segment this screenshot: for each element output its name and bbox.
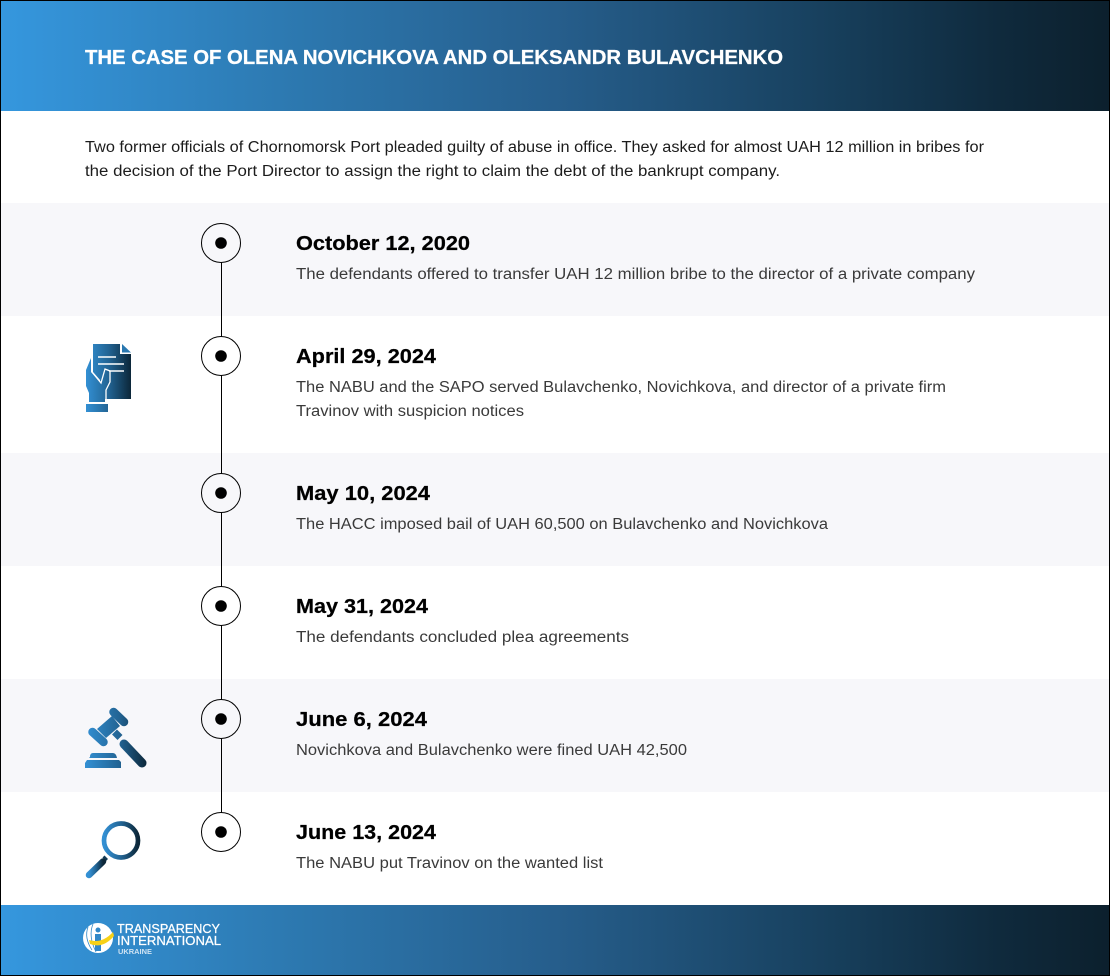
event: May 31, 2024: May 31, 2024 — [296, 595, 429, 618]
event: June 13, 2024: June 13, 2024 — [296, 821, 437, 844]
marker: June 13, 2024 — [202, 812, 240, 852]
event: May 10, 2024 — [296, 482, 828, 533]
event: April 29, 2024: April 29, 2024 — [296, 345, 437, 368]
row background: May 10, 2024 — [1, 453, 1109, 566]
event: April 29, 2024: Travinov with suspicion notices — [296, 403, 524, 420]
event: May 10, 2024: The HACC imposed bail of UAH 60,500 on Bulavchenko and Novichkova — [296, 516, 828, 533]
intro text — [85, 139, 984, 180]
event: April 29, 2024 — [296, 345, 946, 420]
icon: hand holding document — [86, 344, 131, 412]
intro text: the decision of the Port Director to assign the right to claim the debt of the bankrupt company. — [85, 163, 780, 180]
marker: April 29, 2024 — [202, 336, 240, 376]
event: June 6, 2024: Novichkova and Bulavchenko were fined UAH 42,500 — [296, 742, 687, 759]
event: October 12, 2020: The defendants offered to transfer UAH 12 million bribe to the director of a private company — [296, 266, 975, 283]
event: October 12, 2020 — [296, 232, 975, 283]
footer band — [1, 905, 1109, 975]
marker: May 31, 2024 — [202, 586, 240, 626]
event: May 31, 2024: The defendants concluded plea agreements — [296, 629, 629, 646]
event: June 6, 2024 — [296, 708, 687, 759]
row background: June 6, 2024 — [1, 679, 1109, 792]
logo: Transparency International Ukraine: INTERNATIONAL — [117, 933, 221, 948]
logo: Transparency International Ukraine — [83, 921, 221, 956]
event: May 31, 2024 — [296, 595, 629, 646]
event: October 12, 2020: October 12, 2020 — [296, 232, 470, 255]
logo: Transparency International Ukraine: TRANSPARENCY — [117, 921, 220, 936]
icon: judge gavel — [85, 712, 142, 768]
marker: June 6, 2024 — [202, 700, 240, 738]
title: THE CASE OF OLENA NOVICHKOVA AND OLEKSANDR BULAVCHENKO — [85, 46, 783, 69]
header band — [1, 1, 1109, 111]
event: June 6, 2024: June 6, 2024 — [296, 708, 428, 731]
marker: May 10, 2024 — [202, 474, 240, 512]
logo: Transparency International Ukraine: UKRAINE — [118, 949, 152, 956]
event: April 29, 2024: The NABU and the SAPO served Bulavchenko, Novichkova, and director of a private firm — [296, 379, 946, 396]
event: June 13, 2024 — [296, 821, 604, 872]
row background: October 12, 2020 — [1, 203, 1109, 316]
marker: October 12, 2020 — [202, 224, 240, 262]
icon: magnifying glass — [89, 824, 138, 875]
event: May 10, 2024: May 10, 2024 — [296, 482, 431, 505]
timeline axis — [202, 224, 240, 852]
event: June 13, 2024: The NABU put Travinov on the wanted list — [296, 855, 604, 872]
intro text: Two former officials of Chornomorsk Port pleaded guilty of abuse in office. They asked for almost UAH 12 million in bribes for — [85, 139, 984, 156]
